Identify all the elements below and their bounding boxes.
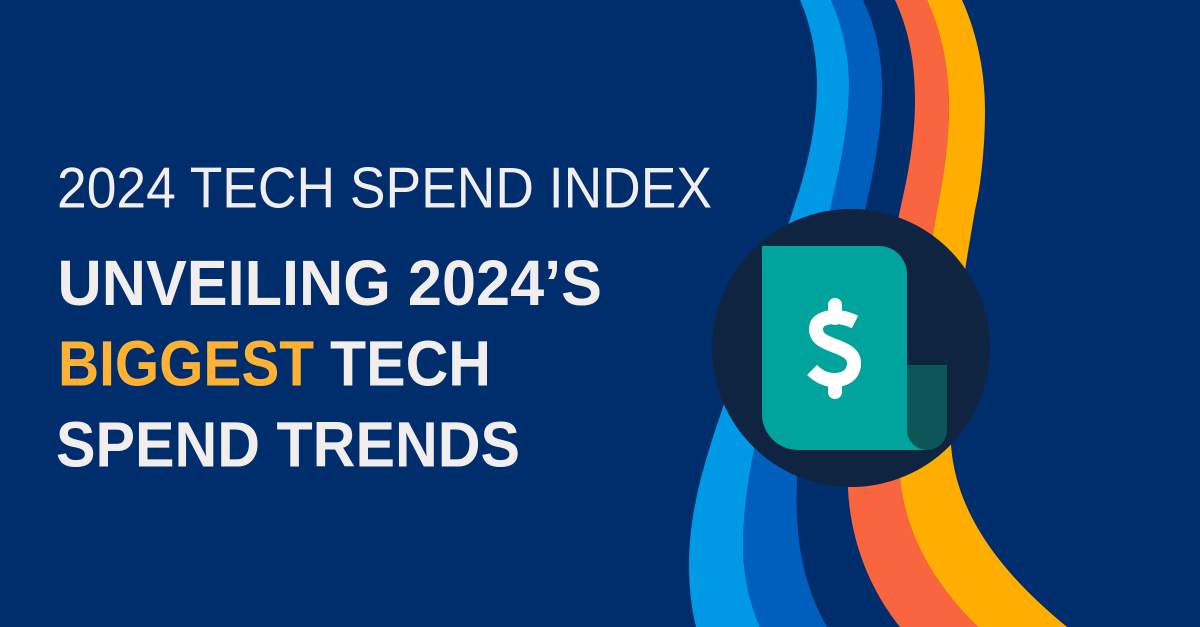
flowing ribbons <box>689 0 1067 627</box>
headline <box>56 247 602 480</box>
headline line 2: highlighted word: BIGGEST <box>58 328 314 400</box>
ribbon: dark blue <box>743 0 882 627</box>
document curl <box>907 365 947 450</box>
document sheet <box>762 246 927 450</box>
eyebrow title: 2024 TECH SPEND INDEX <box>57 156 712 220</box>
dollar sign <box>812 305 855 392</box>
icon background circle <box>712 209 990 487</box>
icon: invoice with dollar sign <box>712 209 990 487</box>
headline line 1: UNVEILING 2024’S <box>58 247 602 319</box>
ribbon: light blue <box>689 0 849 627</box>
headline line 2: remainder: TECH <box>330 328 491 400</box>
headline line 3: SPEND TRENDS <box>56 408 520 480</box>
ribbon: orange <box>848 0 978 627</box>
ribbon: yellow <box>899 0 1067 627</box>
